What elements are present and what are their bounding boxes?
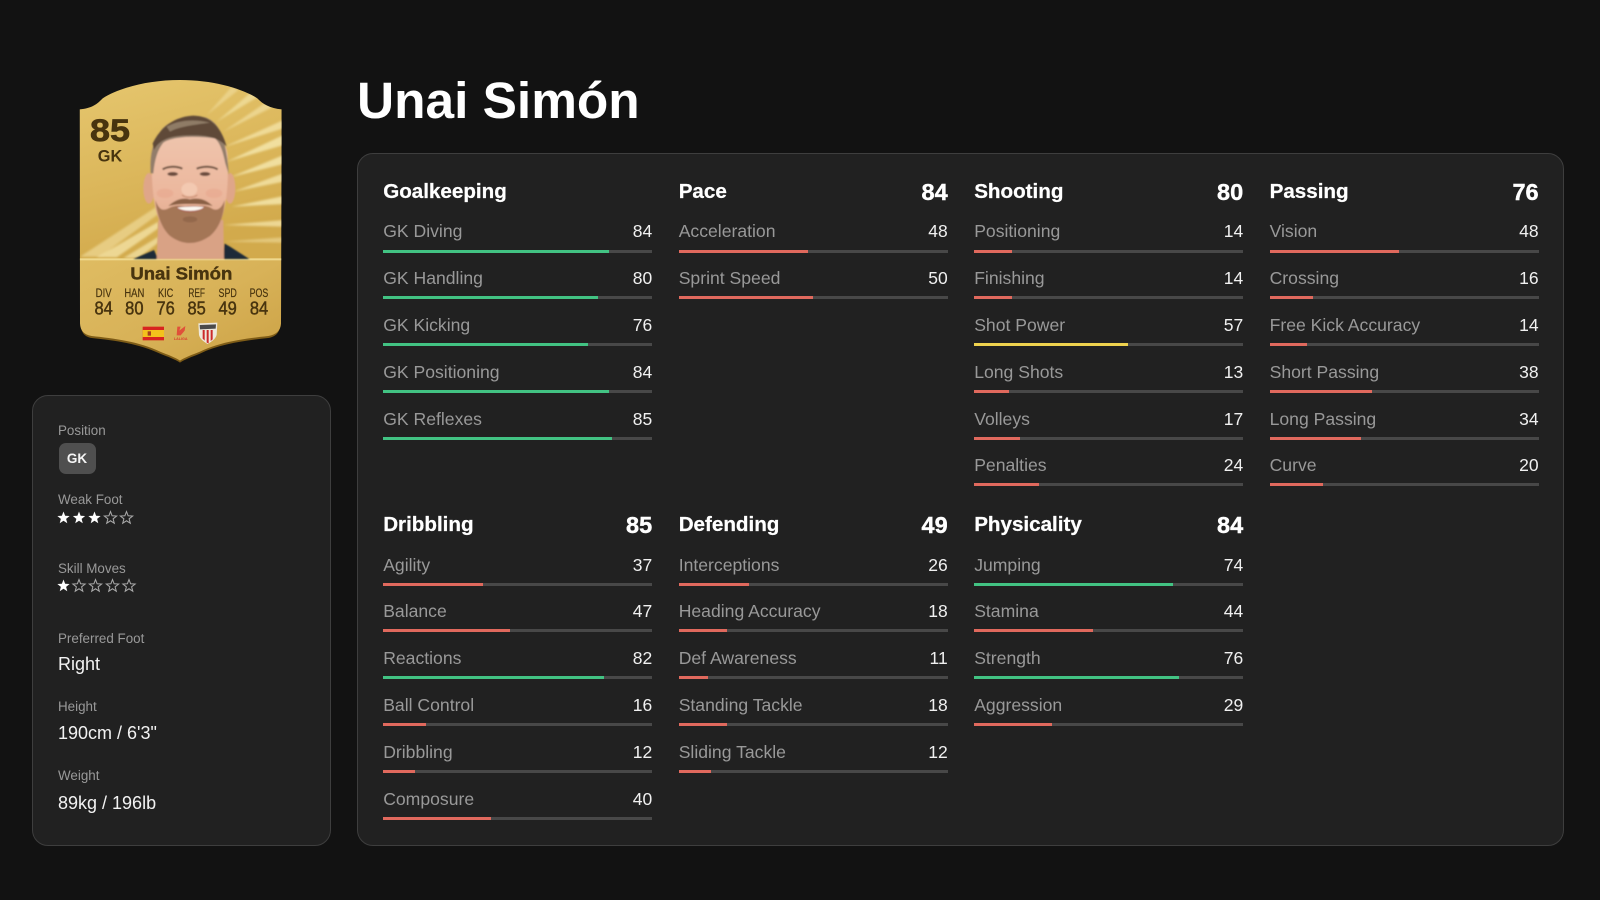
card rim — [80, 320, 281, 363]
stat: Curve: Curve — [1270, 455, 1317, 475]
stat: Curve — [1270, 455, 1539, 486]
stat: Def Awareness — [679, 647, 948, 679]
stat: GK Positioning: GK Positioning — [383, 362, 500, 382]
stat: GK Positioning — [383, 362, 652, 393]
stat: Volleys: 17 — [1224, 408, 1243, 428]
stat: GK Handling — [383, 268, 652, 299]
height value: 190cm / 6'3" — [58, 723, 157, 743]
heading: 80 — [1217, 179, 1243, 205]
stat: Vision — [1270, 221, 1539, 253]
icon: club crest — [198, 323, 217, 344]
stat: Short Passing: 38 — [1519, 362, 1539, 382]
stat: Jumping: Jumping — [974, 555, 1041, 575]
weight value: 89kg / 196lb — [58, 792, 156, 812]
stat: Long Passing: 34 — [1519, 408, 1539, 428]
stat: Standing Tackle: Standing Tackle — [679, 695, 803, 715]
stat: Balance: Balance — [383, 601, 447, 621]
card stats: POS — [250, 286, 268, 300]
stat group: Dribbling — [383, 512, 652, 820]
icon: league logo — [174, 326, 188, 341]
stat: Sprint Speed: 50 — [928, 268, 948, 288]
stat: Penalties — [974, 455, 1243, 486]
stat: Ball Control: Ball Control — [383, 695, 474, 715]
position label: Position — [58, 422, 106, 438]
stat: Crossing: 16 — [1519, 268, 1539, 288]
stat: Volleys — [974, 408, 1243, 440]
lower card plate — [77, 259, 283, 366]
position badge — [58, 443, 96, 474]
stat: Sliding Tackle: 12 — [928, 742, 948, 762]
stat: Volleys: Volleys — [974, 408, 1030, 428]
icon: weak foot stars — [58, 510, 134, 524]
card background rays — [80, 87, 283, 258]
heading — [679, 179, 948, 205]
stat: Finishing: 14 — [1224, 268, 1243, 288]
stat: Free Kick Accuracy: Free Kick Accuracy — [1270, 315, 1420, 335]
stat: GK Handling: 80 — [633, 268, 652, 288]
card position: GK — [98, 148, 122, 166]
stat: GK Kicking: GK Kicking — [383, 315, 470, 335]
stat: Aggression: Aggression — [974, 695, 1062, 715]
preferred foot label: Preferred Foot — [58, 631, 144, 646]
weight label: Weight — [58, 768, 99, 783]
card rating: 85 — [90, 113, 130, 148]
stat: Crossing: Crossing — [1270, 268, 1339, 288]
stat: Composure — [383, 788, 652, 820]
heading: Defending — [679, 513, 779, 536]
stat: Positioning: 14 — [1224, 221, 1243, 241]
stat: Heading Accuracy — [679, 601, 948, 632]
stat: Reactions: Reactions — [383, 648, 461, 668]
stat: Long Shots — [974, 362, 1243, 393]
stat: Standing Tackle — [679, 694, 948, 726]
stat group: Shooting — [974, 179, 1243, 486]
stat: GK Diving — [383, 221, 652, 253]
stat: Dribbling: 12 — [633, 742, 652, 762]
heading — [1270, 179, 1539, 205]
card stats: 49 — [218, 297, 237, 318]
stat: Composure: 40 — [633, 788, 652, 808]
stat: Sprint Speed — [679, 268, 948, 299]
stat: Stamina — [974, 600, 1243, 632]
stat: Stamina: 44 — [1224, 601, 1243, 621]
stat: Vision: Vision — [1270, 221, 1317, 241]
stat: Aggression — [974, 694, 1243, 726]
stat: GK Diving: 84 — [633, 221, 652, 241]
stat: Sliding Tackle — [679, 740, 948, 772]
stat: Free Kick Accuracy: 14 — [1519, 315, 1539, 335]
skill moves label: Skill Moves — [58, 561, 126, 576]
stat: Shot Power: 57 — [1224, 315, 1243, 335]
stat: Short Passing — [1270, 362, 1539, 393]
stat: Heading Accuracy: 18 — [928, 601, 948, 621]
stat: Finishing — [974, 268, 1243, 299]
heading: 84 — [1217, 512, 1243, 538]
heading: 84 — [922, 179, 948, 205]
stat: Jumping: 74 — [1224, 555, 1243, 575]
stat: Composure: Composure — [383, 788, 474, 808]
heading — [383, 512, 652, 538]
card stats: 80 — [125, 297, 144, 318]
card stats: 76 — [156, 297, 175, 318]
card stats: KIC — [158, 286, 173, 300]
heading: Physicality — [974, 513, 1082, 536]
heading: Dribbling — [383, 513, 474, 536]
stat: Acceleration — [678, 221, 948, 253]
stat: Long Shots: 13 — [1224, 362, 1243, 382]
card stats: 85 — [188, 297, 206, 318]
stat: Crossing — [1270, 268, 1539, 299]
card stats: HAN — [124, 286, 144, 300]
stat: Reactions — [383, 648, 652, 679]
card stats: 84 — [94, 297, 113, 318]
stat: Interceptions: Interceptions — [679, 555, 779, 575]
stat: Long Passing — [1270, 408, 1539, 440]
stat: GK Kicking: 76 — [633, 315, 652, 335]
stat: Stamina: Stamina — [974, 601, 1039, 621]
stat: GK Handling: GK Handling — [383, 268, 483, 288]
player photo — [133, 116, 249, 259]
stat: Long Shots: Long Shots — [974, 362, 1063, 382]
card name: Unai Simón — [130, 263, 232, 283]
icon: skill moves stars — [58, 578, 136, 592]
stat: Strength: 76 — [1224, 648, 1243, 668]
height label: Height — [58, 699, 97, 714]
stat group: Physicality — [974, 508, 1243, 726]
card stats: SPD — [218, 286, 237, 300]
heading: Pace — [679, 180, 727, 203]
stat: GK Reflexes: GK Reflexes — [383, 408, 482, 428]
stat: Sprint Speed: Sprint Speed — [679, 268, 780, 288]
stat: Penalties: 24 — [1224, 455, 1243, 475]
stat: Balance — [383, 601, 652, 632]
stat: Heading Accuracy: Heading Accuracy — [679, 601, 820, 621]
stat: Def Awareness: Def Awareness — [679, 648, 797, 668]
stat: Shot Power: Shot Power — [974, 315, 1065, 335]
stat: Positioning — [974, 221, 1243, 253]
stat group: Passing — [1270, 179, 1539, 486]
stat: Free Kick Accuracy — [1270, 315, 1539, 346]
stat: Interceptions — [679, 555, 948, 586]
heading — [974, 179, 1243, 205]
stat: GK Kicking — [383, 315, 652, 346]
stat: Sliding Tackle: Sliding Tackle — [679, 742, 786, 762]
weak foot label: Weak Foot — [58, 492, 123, 507]
stat group: Defending — [679, 512, 948, 773]
heading: 76 — [1512, 179, 1539, 205]
stat: GK Reflexes: 85 — [633, 408, 652, 428]
player card — [74, 80, 282, 592]
panel: player details — [32, 395, 331, 846]
stat: GK Reflexes — [383, 408, 652, 440]
heading: Goalkeeping — [383, 180, 507, 203]
preferred foot value: Right — [58, 654, 100, 674]
stat: Long Passing: Long Passing — [1270, 408, 1376, 428]
stat: Agility: 37 — [633, 555, 652, 575]
title: Unai Simón — [357, 71, 640, 129]
stat group: Goalkeeping — [383, 180, 652, 440]
panel: attributes — [357, 153, 1564, 846]
stat: Strength — [974, 647, 1243, 679]
heading — [679, 512, 948, 538]
stat: Shot Power — [974, 315, 1243, 346]
stat: Acceleration: 48 — [928, 221, 948, 241]
stat: Curve: 20 — [1519, 455, 1539, 475]
stat: Interceptions: 26 — [928, 555, 948, 575]
stat: Penalties: Penalties — [974, 455, 1047, 475]
heading: 49 — [922, 512, 948, 538]
stat group: Pace — [678, 179, 948, 299]
heading: 85 — [626, 512, 652, 538]
stat: Vision: 48 — [1519, 221, 1539, 241]
stat: Dribbling: Dribbling — [383, 742, 453, 762]
stat: Agility — [383, 555, 652, 586]
stat: Agility: Agility — [383, 555, 430, 575]
stat: Short Passing: Short Passing — [1270, 362, 1379, 382]
stat: Aggression: 29 — [1224, 695, 1243, 715]
stat: Strength: Strength — [974, 648, 1041, 668]
heading: Passing — [1270, 180, 1349, 203]
stat: Finishing: Finishing — [974, 268, 1045, 288]
stat: Reactions: 82 — [633, 648, 652, 668]
heading: Shooting — [974, 180, 1063, 203]
card stats: DIV — [96, 286, 112, 300]
stat: GK Diving: GK Diving — [383, 221, 462, 241]
stat: Balance: 47 — [633, 601, 652, 621]
icon: Spain flag — [143, 327, 164, 340]
stat: GK Positioning: 84 — [633, 362, 652, 382]
stat: Dribbling — [383, 742, 652, 773]
stat: Def Awareness: 11 — [930, 648, 948, 668]
stat: Jumping — [974, 553, 1243, 585]
card stats — [94, 286, 268, 318]
heading — [974, 508, 1243, 542]
card body — [77, 77, 283, 366]
stat: Standing Tackle: 18 — [928, 695, 948, 715]
card stats: 84 — [250, 297, 268, 318]
card stats: REF — [188, 286, 205, 300]
stat: Ball Control: 16 — [633, 695, 652, 715]
stat: Acceleration: Acceleration — [679, 221, 776, 241]
icon: league logo: LALIGA — [174, 337, 188, 341]
position badge: GK — [67, 451, 87, 466]
stat: Positioning: Positioning — [974, 221, 1060, 241]
stat: Ball Control — [383, 695, 652, 726]
